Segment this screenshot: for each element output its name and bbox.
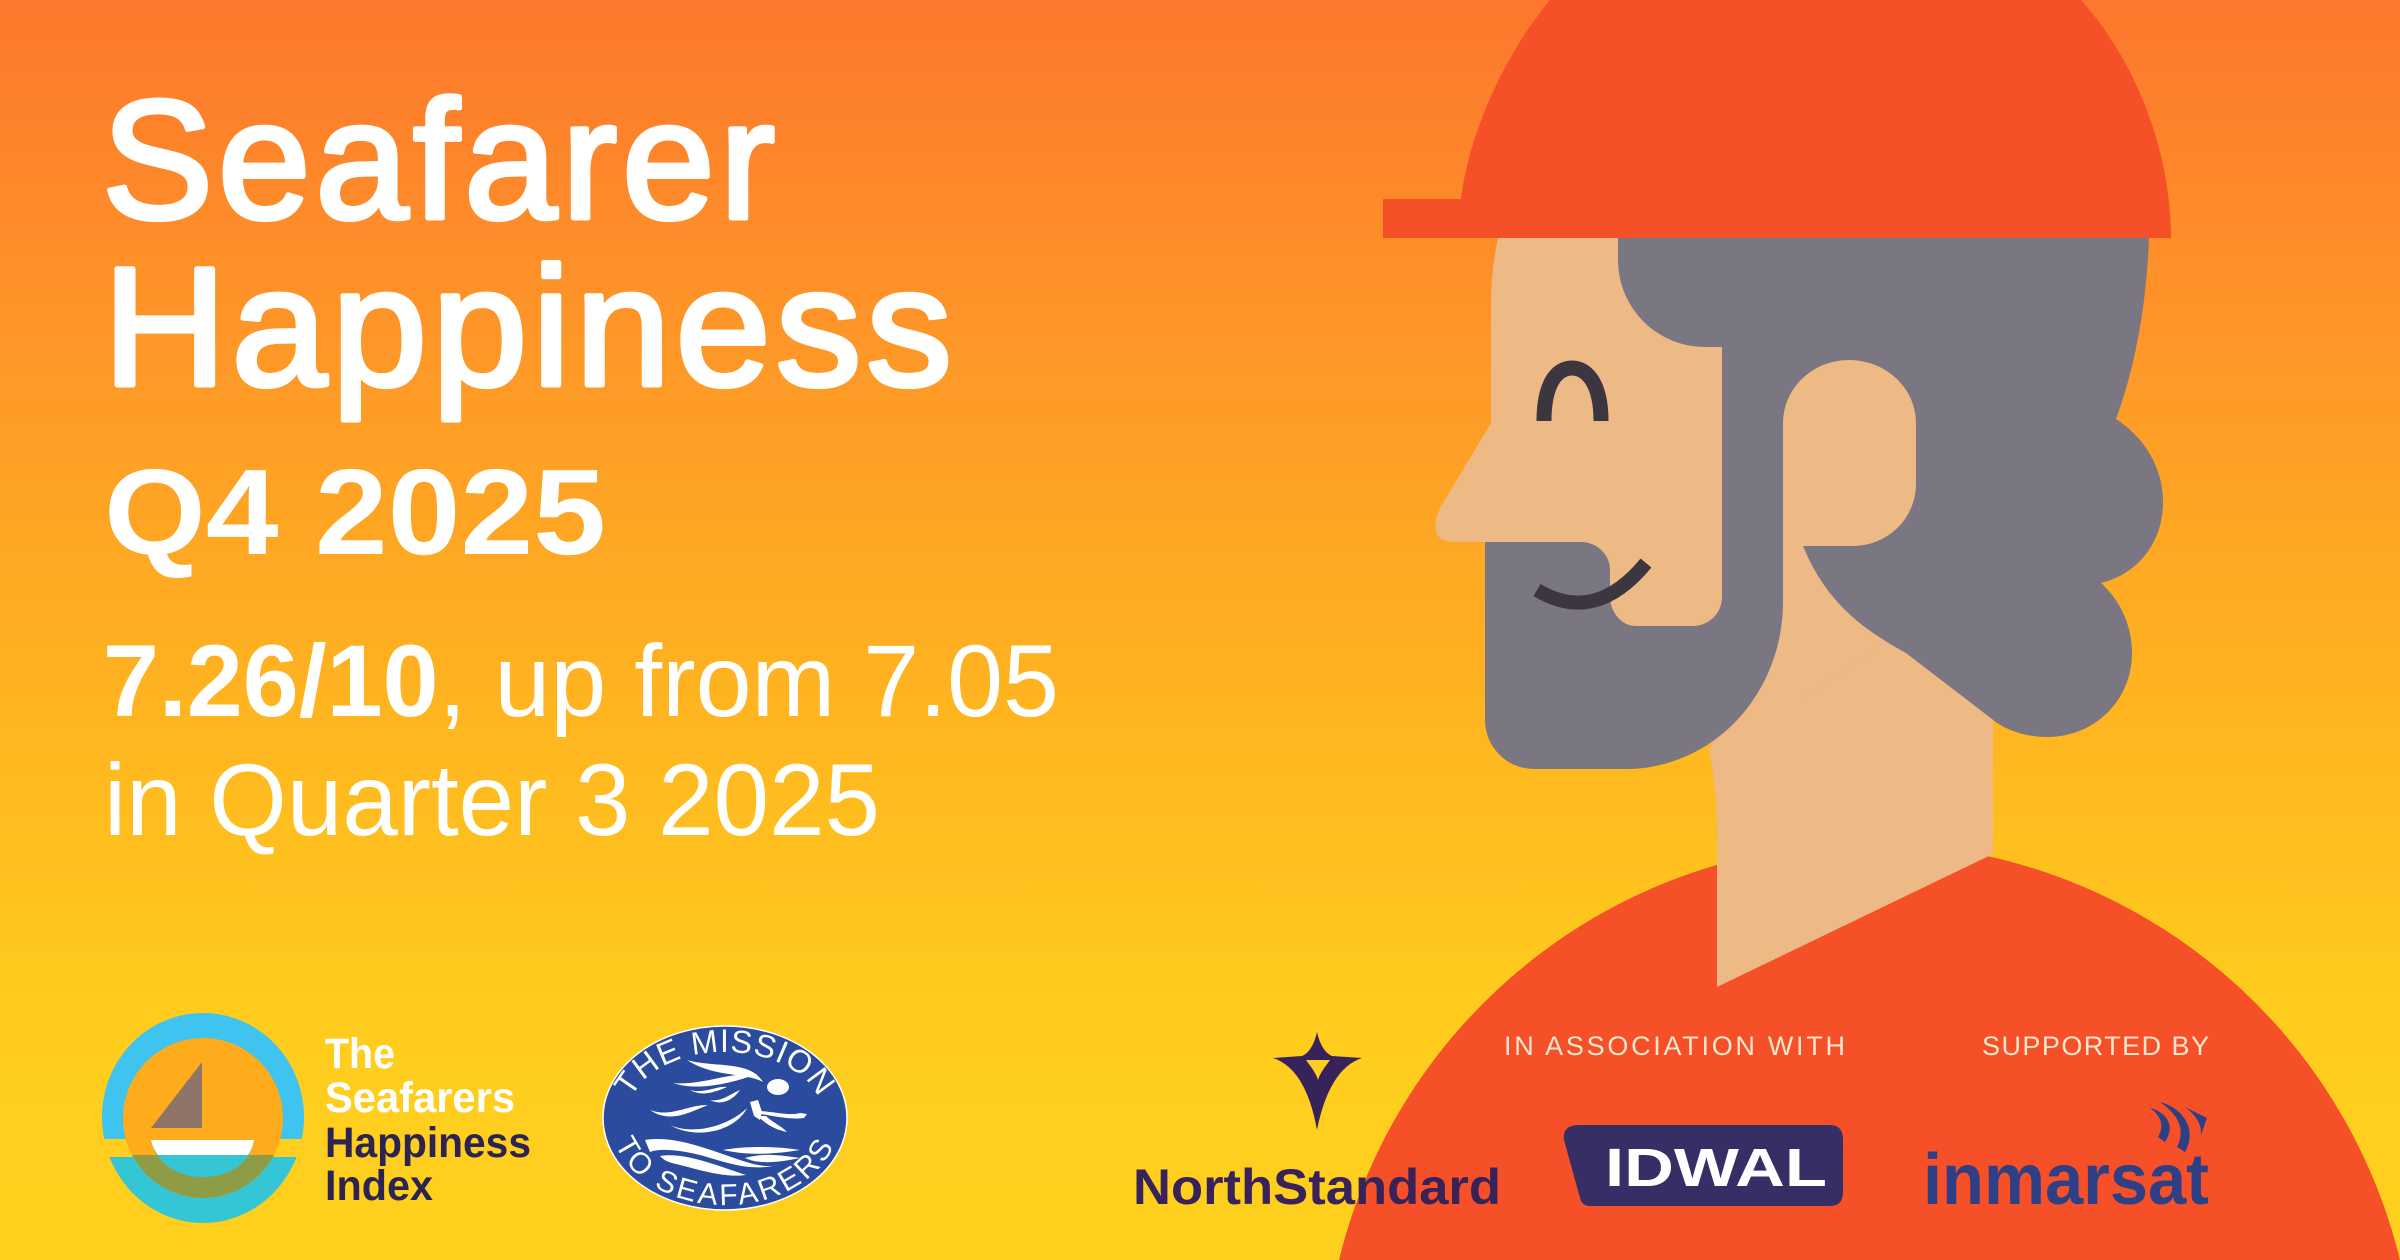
logo wordmark: Seafarers (325, 1074, 515, 1122)
logo wordmark: Happiness (325, 1119, 531, 1167)
logo ring text: THE MISSION (613, 1030, 836, 1095)
logo wordmark: The (325, 1030, 395, 1078)
logo: IDWAL: IDWAL (1605, 1138, 1827, 1198)
shirt (1339, 843, 2400, 1260)
eye (1544, 368, 1601, 421)
logo: inmarsat: inmarsat (1923, 1140, 2209, 1220)
score text: in Quarter 3 2025 (104, 743, 880, 857)
logo ring text: TO SEAFARERS (618, 1134, 832, 1206)
title: Seafarer (102, 65, 780, 254)
subtitle: quarter: Q4 2025 (104, 444, 606, 580)
score text: 7.26/10, up from 7.05 (103, 624, 1059, 738)
logo: NorthStandard (1133, 1032, 1501, 1215)
logo: The Mission to Seafarers (602, 1025, 848, 1211)
illustration: seafarer (1339, 0, 2400, 1260)
logo wordmark (325, 1030, 531, 1210)
logo: The Seafarers Happiness Index (102, 1011, 531, 1223)
title (102, 65, 957, 421)
icon: flying angel and waves (645, 1060, 807, 1176)
title: Happiness (103, 232, 957, 421)
hard hat (1383, 0, 2171, 238)
label: in association with: IN ASSOCIATION WITH (1504, 1031, 1845, 1061)
icon: signal arcs (2150, 1102, 2207, 1152)
logo wordmark: NorthStandard (1133, 1159, 1501, 1215)
icon: boat emblem (102, 1011, 304, 1223)
score text (103, 624, 1059, 857)
logo wordmark: Index (325, 1162, 433, 1210)
logo: inmarsat (1923, 1102, 2209, 1220)
logo ring text (613, 1030, 836, 1206)
smile (1537, 563, 1646, 603)
neck (1709, 600, 1993, 987)
label: supported by: SUPPORTED BY (1982, 1031, 2209, 1061)
face (1435, 238, 1950, 700)
hair and beard (1485, 238, 2163, 769)
logo: IDWAL (1564, 1125, 1843, 1206)
icon: north star (1273, 1032, 1362, 1130)
